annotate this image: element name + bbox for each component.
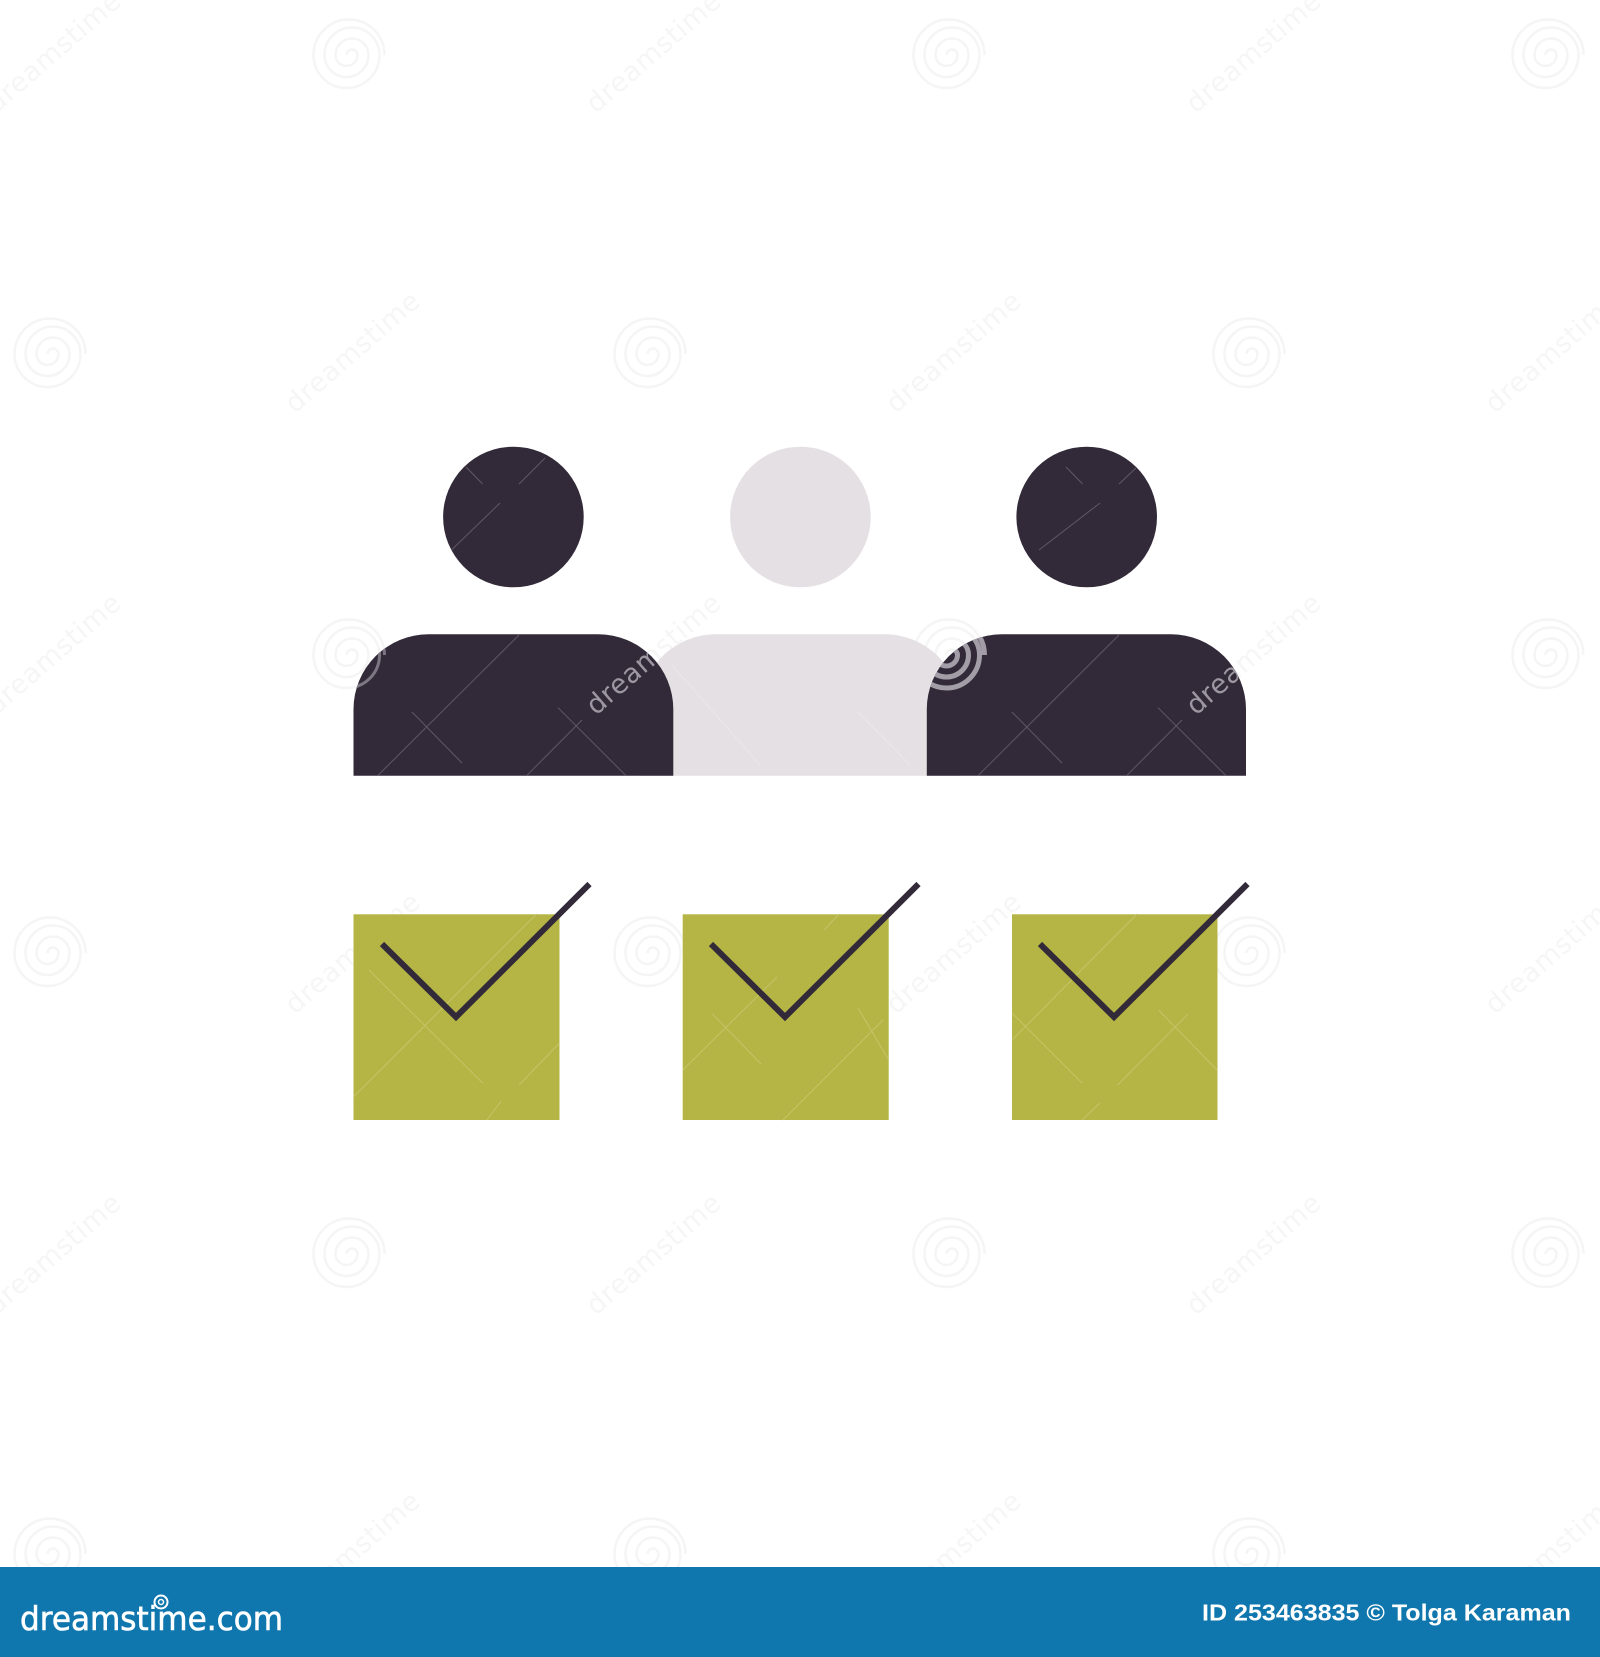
watermark text: dreamstime	[580, 1188, 727, 1321]
watermark text: dreamstime	[880, 286, 1027, 419]
watermark text: dreamstime	[279, 1486, 426, 1619]
person: right (dark)	[927, 447, 1246, 776]
person: left (dark)	[354, 447, 673, 776]
checkbox: left	[354, 884, 590, 1120]
footer bar	[0, 1567, 1600, 1657]
watermark text: dreamstime	[880, 887, 1027, 1020]
checkbox: middle	[683, 884, 918, 1120]
watermark text: dreamstime	[880, 1486, 1027, 1619]
image id and credit: ID 253463835 © Tolga Karaman	[1202, 1600, 1571, 1626]
watermark overlay on dark bodies: dreamstime	[580, 588, 727, 721]
watermark text: dreamstime	[279, 286, 426, 419]
person: middle (light)	[640, 447, 960, 776]
watermark text: dreamstime	[279, 887, 426, 1020]
watermark text: dreamstime	[1180, 588, 1327, 721]
logo: dreamstime.com: dreamstime.com	[20, 1599, 283, 1638]
watermark overlay on dark bodies: dreamstime	[1180, 588, 1327, 721]
watermark overlay on dark bodies	[356, 637, 1238, 713]
checkbox: right	[1012, 884, 1248, 1120]
watermark text: dreamstime	[1180, 1188, 1327, 1321]
watermark text: dreamstime	[580, 588, 727, 721]
